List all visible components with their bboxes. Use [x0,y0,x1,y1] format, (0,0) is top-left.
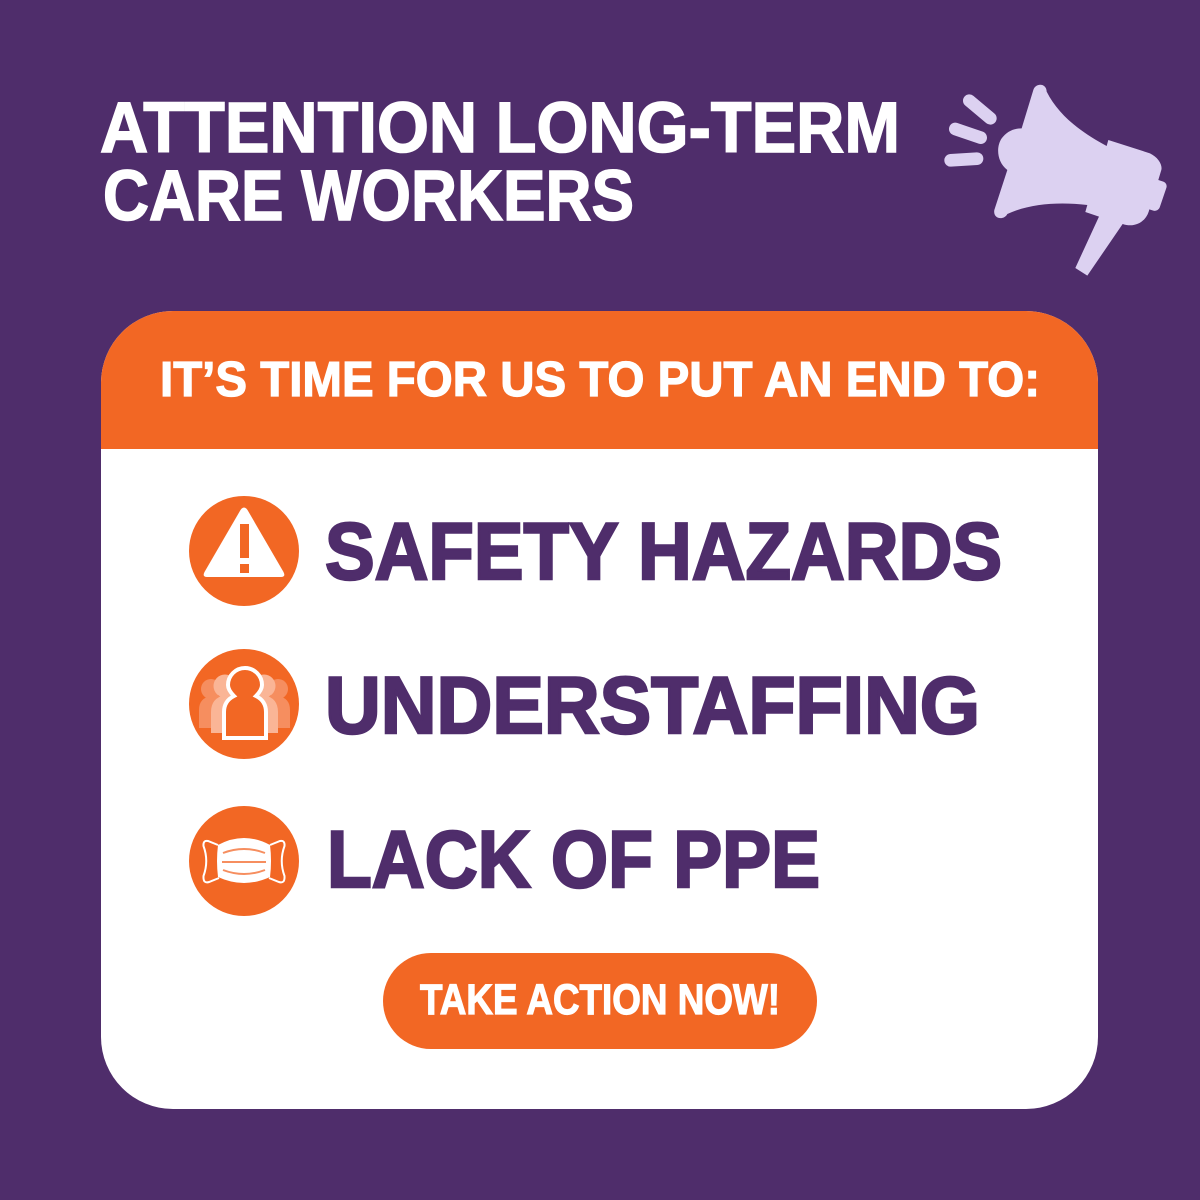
item: safety hazards: SAFETY HAZARDS [325,507,1002,597]
title: ATTENTION LONG-TERM [100,89,900,168]
title [100,89,900,236]
button: take action now: TAKE ACTION NOW! [420,976,780,1024]
item: understaffing: UNDERSTAFFING [325,661,980,751]
icon: warning triangle [189,496,299,606]
panel header [101,311,1098,449]
item: lack of PPE: LACK OF PPE [327,815,820,905]
panel background [101,311,1098,1109]
icon: megaphone [951,85,1167,276]
icon: group of people [189,649,299,759]
title: CARE WORKERS [103,157,634,236]
header text: IT’S TIME FOR US TO PUT AN END TO: [160,353,1040,407]
button: take action now [383,953,817,1049]
panel: end list [101,311,1098,1109]
icon: face mask [189,806,299,916]
